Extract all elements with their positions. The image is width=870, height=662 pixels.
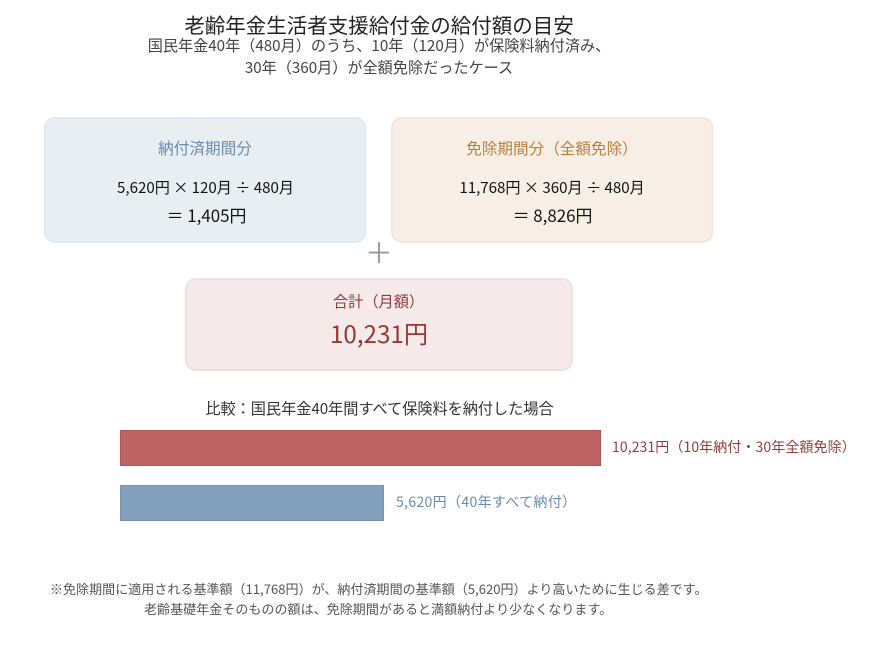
- panel: exempt period: 11,768円 × 360月 ÷ 480月: [459, 176, 645, 198]
- plus sign: ＋: [365, 232, 393, 272]
- panel: total: 10,231円: [330, 315, 428, 350]
- bar: 10,231 yen: 10,231円（10年納付・30年全額免除）: [612, 437, 856, 457]
- subtitle: 国民年金40年（480月）のうち、10年（120月）が保険料納付済み、: [148, 34, 610, 56]
- panel: paid period: 5,620円 × 120月 ÷ 480月: [117, 176, 294, 198]
- panel: exempt period: ＝ 8,826円: [513, 202, 592, 227]
- panel: paid period: [45, 118, 366, 242]
- panel: total: 合計（月額）: [333, 290, 424, 312]
- footnote: ※免除期間に適用される基準額（11,768円）が、納付済期間の基準額（5,620円）より高いために生じる差です。: [50, 579, 708, 598]
- comparison heading: 比較：国民年金40年間すべて保険料を納付した場合: [205, 397, 554, 419]
- panel: paid period: ＝ 1,405円: [167, 202, 246, 227]
- panel: exempt period: [392, 118, 712, 242]
- bar: 10,231 yen: [120, 430, 856, 466]
- panel: exempt period: 免除期間分（全額免除）: [466, 137, 638, 159]
- subtitle: [148, 34, 610, 78]
- footnote: [50, 579, 708, 618]
- subtitle: 30年（360月）が全額免除だったケース: [245, 56, 513, 78]
- panel: total: [186, 279, 572, 370]
- bar: 5,620 yen: 5,620円（40年すべて納付）: [396, 492, 576, 512]
- bar chart: [120, 430, 856, 520]
- bar: 5,620 yen: [120, 486, 576, 520]
- title: 老齢年金生活者支援給付金の給付額の目安: [184, 9, 574, 39]
- footnote: 老齢基礎年金そのものの額は、免除期間があると満額納付より少なくなります。: [144, 599, 612, 618]
- panel: paid period: 納付済期間分: [158, 136, 252, 159]
